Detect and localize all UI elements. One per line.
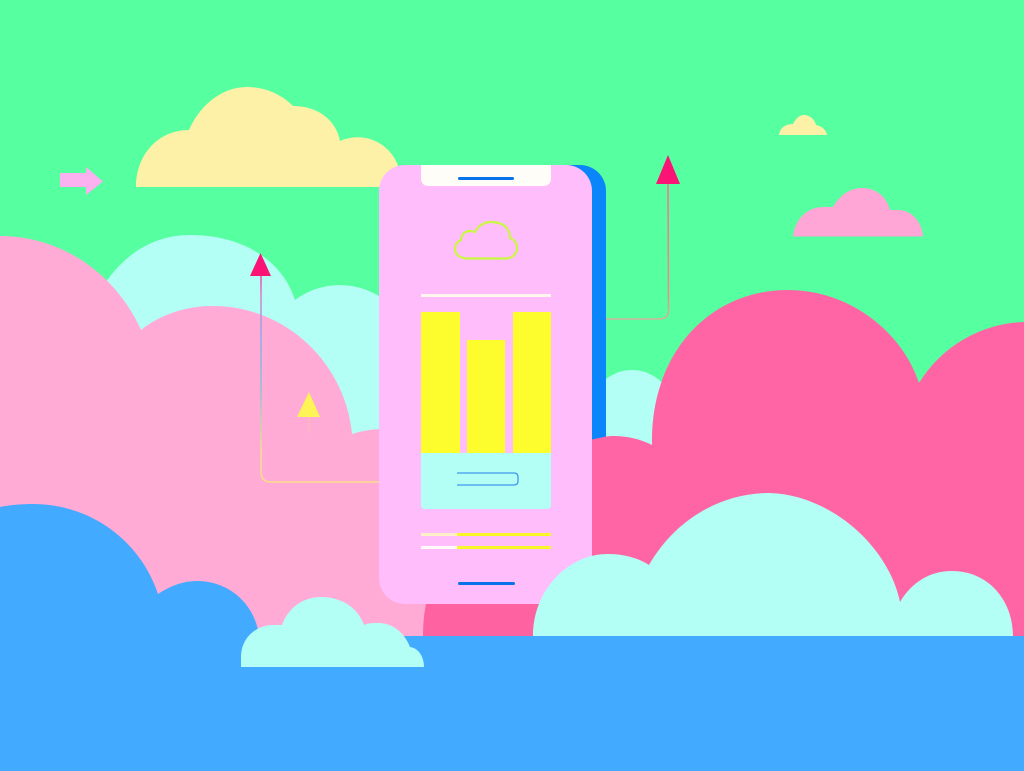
aqua panel <box>421 453 551 509</box>
cloud: small pale aqua bottom <box>241 597 424 667</box>
arrow: connector left up <box>250 253 380 482</box>
phone side: blue <box>560 165 606 450</box>
cloud: pale yellow top left <box>136 87 401 187</box>
cloud: small yellow top right <box>779 115 827 135</box>
icon: yellow triangle <box>297 392 320 433</box>
text line one <box>421 533 551 536</box>
cloud: large light pink left <box>0 236 440 640</box>
cloud: pale aqua small behind phone right <box>590 370 674 454</box>
phone notch <box>421 165 551 186</box>
divider line <box>421 294 551 297</box>
blue ground <box>0 636 1024 771</box>
icon: cloud outline <box>455 222 517 258</box>
text line two <box>421 546 551 549</box>
panel button outline <box>457 473 518 485</box>
arrow: connector right up <box>606 155 680 319</box>
bar chart <box>421 312 551 453</box>
phone body <box>379 165 592 604</box>
cloud: pale aqua behind phone left <box>95 235 400 445</box>
hot pink base under phone <box>423 600 620 640</box>
cloud: small pink right <box>793 188 923 236</box>
cloud: blue left <box>0 504 259 771</box>
cloud: pale aqua large right <box>533 493 1013 640</box>
home bar <box>458 582 515 585</box>
phone speaker <box>458 177 514 180</box>
phone <box>379 165 592 604</box>
arrow: pink pointing right <box>60 167 103 195</box>
cloud: large hot pink right <box>585 290 1024 640</box>
